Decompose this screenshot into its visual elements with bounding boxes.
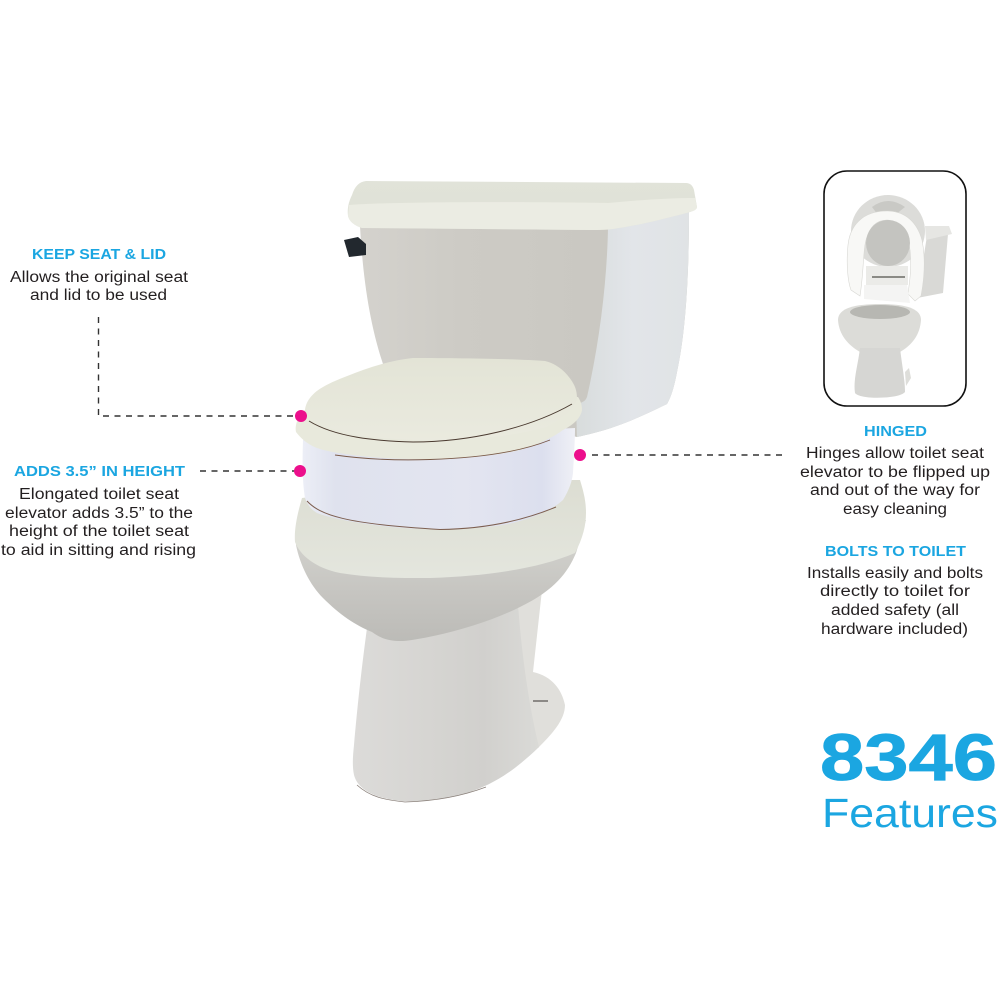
inset toilet pedestal [855,348,905,398]
inset frame [824,171,966,406]
text block: keep seat and lid: Allows the original seat [10,269,189,286]
text block: bolts to toilet: added safety (all [831,602,959,619]
text block: hinged [800,445,990,518]
text block: keep seat and lid [10,269,189,304]
title: model number and features [820,720,998,836]
text block: bolts to toilet [807,565,983,638]
inset photo: hinged seat flipped up [824,171,966,406]
marker dot: keep seat and lid [295,410,307,422]
callout: hinged [574,423,990,518]
text block: bolts to toilet: directly to toilet for [820,583,970,600]
main toilet photo [295,181,697,802]
text block: bolts to toilet: Installs easily and bolts [807,565,983,582]
text block: adds height: elevator adds 3.5” to the [5,505,193,522]
callout: adds height [1,463,306,559]
heading: bolts to toilet: BOLTS TO TOILET [825,543,966,560]
marker dot: hinged [574,449,586,461]
text block: adds height: height of the toilet seat [9,523,190,540]
heading: hinged: HINGED [864,423,927,440]
callout: keep seat and lid [10,246,307,422]
flush handle [344,237,366,257]
text block: hinged: Hinges allow toilet seat [806,445,985,462]
text block: keep seat and lid: and lid to be used [30,287,167,304]
white seat elevator riser [303,428,575,530]
marker dot: adds height [294,465,306,477]
leader line: hinged [592,454,786,456]
toilet seat lid [305,358,577,442]
text block: bolts to toilet: hardware included) [821,621,968,638]
text block: adds height [1,486,196,559]
inset toilet [838,195,952,398]
tank lid front band [348,198,697,230]
inset open riser [847,211,924,301]
toilet base pedestal [353,590,565,802]
text block: hinged: and out of the way for [810,482,980,499]
text block: adds height: Elongated toilet seat [19,486,180,503]
model number: 8346 [820,720,997,794]
text block: hinged: elevator to be flipped up [800,464,990,481]
text block: adds height: to aid in sitting and rising [1,542,196,559]
callout: bolts to toilet [807,543,983,638]
inset toilet bowl [838,304,921,355]
leader line: keep seat and lid [98,317,295,416]
heading: adds height: ADDS 3.5” IN HEIGHT [14,463,185,480]
heading: keep seat and lid: KEEP SEAT & LID [32,246,166,263]
bowl rim [295,480,586,578]
toilet tank [344,181,697,437]
seat ring [296,397,582,460]
tank lid [348,181,697,230]
leader line: adds height [200,470,295,472]
text block: hinged: easy cleaning [843,501,947,518]
features word: Features [822,790,998,836]
toilet bowl [295,480,586,641]
